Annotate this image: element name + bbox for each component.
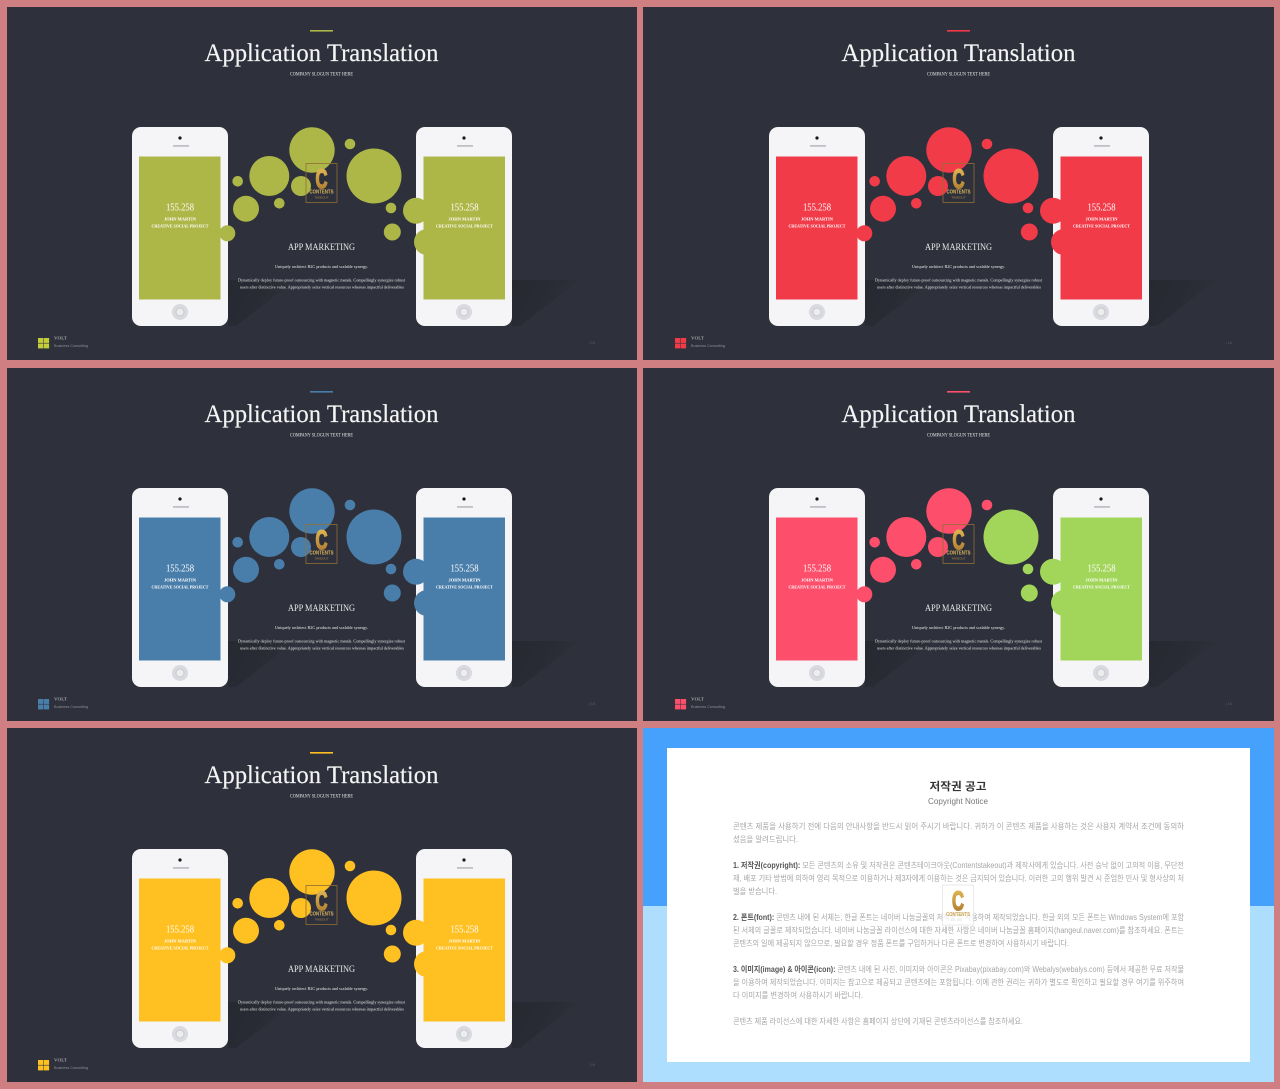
footer brand: Business Consulting: [54, 1066, 88, 1070]
description: Dynamically deploy future-proof outsourcing with magnetic metals. Compellingly synergize robust: [238, 638, 406, 644]
right phone: [416, 488, 512, 687]
left phone text: 155.258: [803, 202, 831, 214]
bubbles: [219, 488, 440, 616]
panel: olive slide: [7, 7, 637, 360]
title: Application Translation: [842, 401, 1076, 428]
description: APP MARKETING: [925, 242, 992, 252]
page number: | 16: [589, 341, 595, 345]
right phone text: CREATIVE SOCIAL PROJECT: [436, 224, 493, 228]
phone shadows: [228, 641, 580, 687]
description: APP MARKETING: [288, 603, 355, 613]
page number: | 16: [589, 702, 595, 706]
right phone text: [1073, 564, 1130, 590]
left phone text: 155.258: [166, 202, 194, 214]
footer brand: VOLT: [54, 1058, 68, 1062]
description: Dynamically deploy future-proof outsourcing with magnetic metals. Compellingly synergize robust: [238, 278, 406, 282]
phone shadows: [865, 641, 1217, 687]
footer brand: [38, 696, 88, 709]
panel: red slide: [643, 7, 1274, 360]
accent bar: [310, 391, 333, 393]
page number: | 16: [1226, 341, 1232, 345]
description: Dynamically deploy future-proof outsourcing with magnetic metals. Compellingly synergize robust: [875, 638, 1043, 644]
description: [875, 603, 1043, 650]
slogan: COMPANY SLOGUN TEXT HERE: [290, 434, 353, 438]
accent bar: [310, 752, 333, 754]
left phone text: CREATIVE SOCIAL PROJECT: [152, 584, 208, 590]
accent bar: [310, 30, 333, 32]
phone shadows: [865, 280, 1217, 326]
left phone text: 155.258: [166, 924, 194, 936]
notice subheading: Copyright Notice: [928, 796, 988, 806]
right phone text: [436, 202, 493, 228]
logo watermark: CONTENTS: [310, 550, 334, 556]
left phone text: [152, 564, 208, 590]
right phone text: JOHN MARTIN: [448, 216, 481, 222]
description: users after distinctive value. Appropriately seize vertical resources whereas impactful deliverables: [877, 284, 1041, 290]
right phone text: [1073, 202, 1130, 228]
phone shadows: [228, 280, 580, 326]
right phone text: JOHN MARTIN: [1086, 216, 1118, 222]
right phone text: 155.258: [450, 564, 478, 574]
footer brand: [675, 696, 725, 709]
intro paragraph: 셨음을 알려드립니다.: [733, 834, 798, 844]
left phone text: 155.258: [803, 564, 831, 574]
panel: yellow slide: [7, 728, 637, 1082]
intro paragraph: 콘텐츠 제품을 사용하기 전에 다음의 안내사항을 반드시 읽어 주시기 바랍니다. 귀하가 이 콘텐츠 제품을 사용하는 것은 사용자 계약서 조건에 동의하: [733, 821, 1185, 831]
description: Uniquely architect B2C products and scalable synergy.: [275, 625, 368, 630]
slogan: COMPANY SLOGUN TEXT HERE: [927, 72, 990, 78]
right phone: [416, 127, 512, 326]
copyright paragraph: 벌을 받습니다.: [733, 886, 777, 896]
font paragraph: 콘텐츠의 일에 제공되지 않으므로, 필요할 경우 정품 폰트를 구입하거나 다른 폰트로 변경하여 사용하시기 바랍니다.: [733, 938, 1069, 948]
font paragraph: 2. 폰트(font): 콘텐츠 내에 된 서체는, 한글 폰트는 네이버 나눔글꼴의 저작물을 사용하여 제작되었습니다. 한글 외의 모든 폰트는 Windows System에 포함: [733, 912, 1185, 922]
image paragraph: 을 이용하여 제작되었습니다. 이미지는 참고으로 제공되고 콘텐츠에는 포함됩니다. 이에 관한 권리는 귀하가 별도로 확인하고 필요할 경우 여기를 위주하여: [733, 977, 1184, 987]
footer brand: VOLT: [54, 696, 68, 702]
description: Uniquely architect B2C products and scalable synergy.: [275, 264, 368, 269]
left phone text: [152, 202, 208, 228]
left phone text: [152, 924, 208, 950]
description: users after distinctive value. Appropriately seize vertical resources whereas impactful deliverables: [240, 284, 404, 290]
left phone: [132, 849, 228, 1048]
right phone text: [436, 924, 493, 950]
logo watermark: C: [316, 164, 328, 194]
description: users after distinctive value. Appropriately seize vertical resources whereas impactful deliverables: [877, 646, 1041, 650]
title: Application Translation: [204, 762, 439, 789]
description: [875, 242, 1043, 290]
logo watermark: TAKEOUT: [314, 196, 329, 200]
right phone text: JOHN MARTIN: [448, 938, 481, 944]
description: [238, 964, 406, 1012]
slogan: COMPANY SLOGUN TEXT HERE: [927, 434, 990, 438]
logo watermark: TAKEOUT: [314, 556, 329, 560]
left phone text: CREATIVE SOCIAL PROJECT: [152, 946, 208, 950]
white notice card: [667, 748, 1250, 1062]
phone shadows: [228, 1002, 580, 1048]
panel: pink and green slide: [643, 368, 1274, 721]
right phone text: 155.258: [1088, 202, 1116, 214]
left phone text: 155.258: [166, 564, 194, 574]
left phone text: JOHN MARTIN: [164, 216, 197, 222]
right phone text: CREATIVE SOCIAL PROJECT: [436, 946, 493, 950]
panel: copyright notice: [643, 728, 1274, 1082]
description: APP MARKETING: [288, 964, 355, 974]
footer brand: VOLT: [691, 336, 705, 340]
logo watermark: C: [952, 886, 964, 916]
footer brand: Business Consulting: [691, 705, 725, 709]
description: Uniquely architect B2C products and scalable synergy.: [912, 625, 1005, 630]
left phone: [769, 127, 865, 326]
footer brand: Business Consulting: [54, 344, 88, 348]
footer brand: Business Consulting: [691, 344, 725, 348]
image paragraph: 3. 이미지(image) & 아이콘(icon): 콘텐츠 내에 된 사진, 이미지와 아이콘은 Pixabay(pixabay.com)와 Webalys(webalys.com) 등에서 제공한 무료 저작물: [733, 964, 1184, 974]
copyright paragraph: 1. 저작권(copyright): 모든 콘텐츠의 소유 및 저작권은 콘텐츠테이크아웃(Contentstakeout)과 제작사에게 있습니다. 사전 승낙 없이 고의적 이용, 무단전: [733, 860, 1184, 870]
panel: blue slide: [7, 368, 637, 721]
description: users after distinctive value. Appropriately seize vertical resources whereas impactful deliverables: [240, 1006, 404, 1012]
left phone text: CREATIVE SOCIAL PROJECT: [788, 584, 846, 590]
footer brand: VOLT: [691, 696, 705, 702]
logo watermark: CONTENTS: [310, 912, 334, 918]
slogan: COMPANY SLOGUN TEXT HERE: [290, 794, 353, 800]
title: Application Translation: [204, 401, 439, 428]
left phone text: CREATIVE SOCIAL PROJECT: [788, 224, 846, 228]
logo watermark: [943, 524, 974, 564]
left phone: [769, 488, 865, 687]
logo watermark: TAKEOUT: [952, 556, 966, 560]
accent bar: [947, 30, 970, 32]
description: Dynamically deploy future-proof outsourcing with magnetic metals. Compellingly synergize robust: [875, 278, 1043, 282]
image paragraph: 다 이미지를 변경하여 사용하시기 바랍니다.: [733, 990, 863, 1000]
left phone text: [788, 564, 846, 590]
accent bar: [947, 391, 970, 393]
logo watermark: C: [952, 525, 964, 555]
description: users after distinctive value. Appropriately seize vertical resources whereas impactful deliverables: [240, 646, 404, 650]
logo watermark: TAKEOUT: [952, 196, 966, 200]
left phone text: CREATIVE SOCIAL PROJECT: [152, 224, 208, 228]
right phone text: JOHN MARTIN: [1086, 578, 1118, 582]
right phone text: 155.258: [450, 202, 478, 214]
right phone text: 155.258: [450, 924, 478, 936]
font paragraph: 된 서체의 글꼴로 제작되었습니다. 네이버 나눔글꼴 라이선스에 대한 자세한 사항은 네이버 나눔글꼴 홈페이지(hangeul.naver.com)를 참조하세요. 폰트는: [733, 925, 1184, 935]
footer brand: [38, 336, 88, 348]
title: Application Translation: [842, 40, 1076, 67]
description: [238, 242, 406, 290]
left phone text: JOHN MARTIN: [164, 938, 197, 944]
description: Uniquely architect B2C products and scalable synergy.: [912, 264, 1005, 269]
page number: | 16: [1226, 702, 1232, 706]
left phone text: [788, 202, 846, 228]
font paragraph: [733, 912, 1185, 948]
left phone: [132, 488, 228, 687]
bubbles: [856, 127, 1077, 255]
logo watermark: [306, 164, 337, 202]
description: [238, 603, 406, 650]
right phone text: 155.258: [1088, 564, 1116, 574]
bubbles: [856, 488, 1077, 616]
license paragraph: 콘텐츠 제품 라이선스에 대한 자세한 사항은 홈페이지 상단에 기재된 콘텐츠라이선스를 참조하세요.: [733, 1016, 1023, 1026]
logo watermark: [306, 524, 337, 564]
description: APP MARKETING: [288, 242, 355, 252]
logo watermark: C: [316, 525, 328, 555]
bubbles: [219, 127, 440, 255]
intro paragraph: [733, 821, 1185, 844]
page number: | 16: [589, 1063, 595, 1067]
footer brand: [675, 336, 725, 348]
image paragraph: [733, 964, 1184, 1000]
right phone text: CREATIVE SOCIAL PROJECT: [436, 584, 493, 590]
right phone text: CREATIVE SOCIAL PROJECT: [1073, 224, 1130, 228]
slogan: COMPANY SLOGUN TEXT HERE: [290, 72, 353, 78]
left phone text: JOHN MARTIN: [164, 578, 197, 582]
logo watermark: CONTENTS: [946, 912, 971, 918]
bubbles: [219, 849, 440, 977]
right phone text: JOHN MARTIN: [448, 578, 481, 582]
right phone text: CREATIVE SOCIAL PROJECT: [1073, 584, 1130, 590]
footer brand: VOLT: [54, 336, 68, 340]
footer brand: [38, 1058, 88, 1070]
left phone text: JOHN MARTIN: [801, 216, 834, 222]
logo watermark: TAKEOUT: [314, 918, 329, 922]
copyright paragraph: 재, 배포 기타 방법에 의하여 영리 목적으로 이용하거나 제3자에게 이용하는 것은 금지되어 있습니다. 이러한 고의 행위 발견 시 준엄한 민사 및 형사상의 처: [733, 873, 1184, 883]
logo watermark: [942, 885, 974, 925]
footer brand: Business Consulting: [54, 705, 88, 709]
description: Dynamically deploy future-proof outsourcing with magnetic metals. Compellingly synergize robust: [238, 1000, 406, 1004]
logo watermark: CONTENTS: [946, 550, 971, 556]
logo watermark: CONTENTS: [310, 190, 334, 196]
logo watermark: C: [952, 164, 964, 194]
logo watermark: [306, 886, 337, 924]
right phone: [1053, 488, 1149, 687]
right phone: [1053, 127, 1149, 326]
left phone: [132, 127, 228, 326]
logo watermark: C: [316, 886, 328, 916]
copyright paragraph: [733, 860, 1184, 896]
left phone text: JOHN MARTIN: [801, 578, 834, 582]
logo watermark: CONTENTS: [946, 190, 971, 196]
notice heading: 저작권 공고: [930, 779, 986, 793]
right phone: [416, 849, 512, 1048]
right phone text: [436, 564, 493, 590]
title: Application Translation: [204, 40, 439, 67]
logo watermark: [943, 164, 974, 202]
description: APP MARKETING: [925, 603, 992, 613]
description: Uniquely architect B2C products and scalable synergy.: [275, 986, 368, 991]
